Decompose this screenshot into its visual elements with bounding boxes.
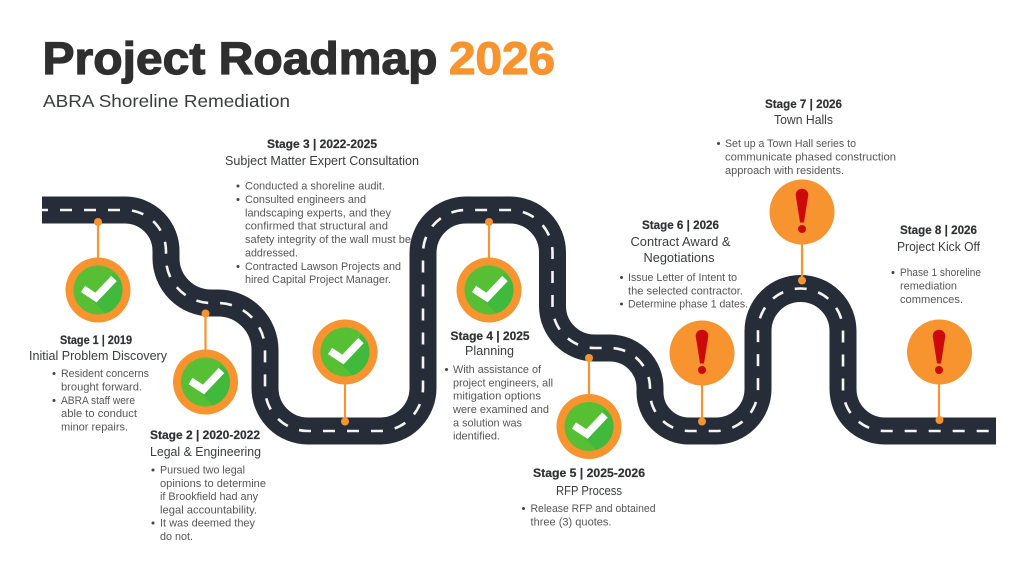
panel: stage 7 text: Set up a Town Hall series to xyxy=(725,138,856,150)
title: 2026 xyxy=(449,33,555,84)
panel: stage 1 text: Stage 1 | 2019 xyxy=(60,333,132,347)
panel: stage 7 marker xyxy=(770,180,834,284)
panel: stage 6 text: Negotiations xyxy=(644,250,714,265)
panel: stage 2 text: if Brookfield had any xyxy=(160,491,259,503)
panel: stage 1 text: minor repairs. xyxy=(61,422,128,434)
panel: stage 3 text: addressed. xyxy=(245,248,298,260)
panel: stage 8 text: Phase 1 shoreline xyxy=(900,267,981,279)
panel: stage 4 text: With assistance of xyxy=(453,364,541,376)
subtitle: ABRA Shoreline Remediation xyxy=(43,91,290,111)
panel: stage 6 text: Contract Award & xyxy=(630,234,731,249)
panel: stage 8 text xyxy=(892,223,981,306)
panel: stage 5 text: three (3) quotes. xyxy=(530,516,612,528)
panel: stage 7 text: Town Halls xyxy=(774,112,833,127)
panel: stage 6 text: Determine phase 1 dates. xyxy=(628,298,748,310)
panel: stage 3 text: Stage 3 | 2022-2025 xyxy=(267,137,377,151)
panel: stage 7 text: communicate phased construction xyxy=(725,152,896,164)
panel: stage 6 text: the selected contractor. xyxy=(628,286,743,298)
panel: stage 8 marker xyxy=(907,320,972,424)
panel: stage 1 text: ABRA staff were xyxy=(61,395,135,407)
panel: stage 2 text: do not. xyxy=(160,531,193,543)
panel: stage 6 text xyxy=(620,218,748,310)
panel: stage 4 text xyxy=(445,329,553,442)
panel: stage 3 text: Contracted Lawson Projects and xyxy=(245,261,401,273)
panel: stage 1 text xyxy=(29,333,168,434)
panel: stage 3 text: safety integrity of the wall must be xyxy=(245,234,411,246)
panel: stage 2 text: legal accountability. xyxy=(160,504,257,516)
panel: stage 3 text: Consulted engineers and xyxy=(245,194,366,206)
panel: stage 4 text: were examined and xyxy=(452,404,549,416)
panel: stage 4 marker xyxy=(456,218,522,322)
panel: stage 1 marker xyxy=(66,218,130,322)
panel: stage 8 text: Stage 8 | 2026 xyxy=(900,223,977,237)
panel: stage 2 text xyxy=(150,428,266,543)
panel: stage 4 text: project engineers, all xyxy=(453,378,553,390)
road xyxy=(42,210,996,431)
panel: stage 7 text: approach with residents. xyxy=(725,165,844,177)
panel: stage 5 text: Release RFP and obtained xyxy=(530,503,656,515)
panel: stage 5 marker xyxy=(556,354,622,459)
panel: stage 3 text: landscaping experts, and they xyxy=(245,208,392,220)
panel: stage 6 marker xyxy=(670,320,734,426)
panel: stage 3 text: Subject Matter Expert Consultation xyxy=(225,153,419,168)
panel: stage 4 text: identified. xyxy=(453,430,500,442)
panel: stage 2 text: Legal & Engineering xyxy=(150,444,261,459)
panel: stage 3 text xyxy=(225,137,419,286)
panel: stage 4 text: a solution was xyxy=(453,418,522,430)
panel: stage 4 text: Planning xyxy=(465,343,514,358)
panel: stage 1 text: Initial Problem Discovery xyxy=(29,348,168,363)
panel: stage 6 text: Stage 6 | 2026 xyxy=(642,218,719,232)
panel: stage 2 marker xyxy=(173,310,238,414)
panel: stage 2 text: opinions to determine xyxy=(160,478,266,490)
panel: stage 4 text: Stage 4 | 2025 xyxy=(450,329,530,343)
panel: stage 3 text: Conducted a shoreline audit. xyxy=(245,180,385,192)
panel: stage 7 text xyxy=(717,97,896,177)
panel: stage 2 text: Stage 2 | 2020-2022 xyxy=(150,428,260,442)
panel: stage 8 text: Project Kick Off xyxy=(897,239,980,254)
panel: stage 8 text: remediation xyxy=(900,280,957,292)
panel: stage 2 text: It was deemed they xyxy=(160,518,256,530)
panel: stage 1 text: Resident concerns xyxy=(61,368,149,380)
panel: stage 6 text: Issue Letter of Intent to xyxy=(628,272,737,284)
title: Project Roadmap xyxy=(42,33,438,84)
panel: stage 3 text: hired Capital Project Manager. xyxy=(245,274,391,286)
panel: stage 3 marker xyxy=(312,320,378,426)
panel: stage 1 text: able to conduct xyxy=(61,408,137,420)
panel: stage 5 text xyxy=(522,466,656,528)
panel: stage 2 text: Pursued two legal xyxy=(160,464,245,476)
panel: stage 4 text: mitigation options xyxy=(453,390,541,402)
panel: stage 7 text: Stage 7 | 2026 xyxy=(765,97,842,111)
panel: stage 5 text: Stage 5 | 2025-2026 xyxy=(533,466,645,480)
panel: stage 3 text: confirmed that structural and xyxy=(245,220,388,232)
panel: stage 5 text: RFP Process xyxy=(556,483,622,498)
panel: stage 8 text: commences. xyxy=(900,294,963,306)
panel: stage 1 text: brought forward. xyxy=(61,382,142,394)
